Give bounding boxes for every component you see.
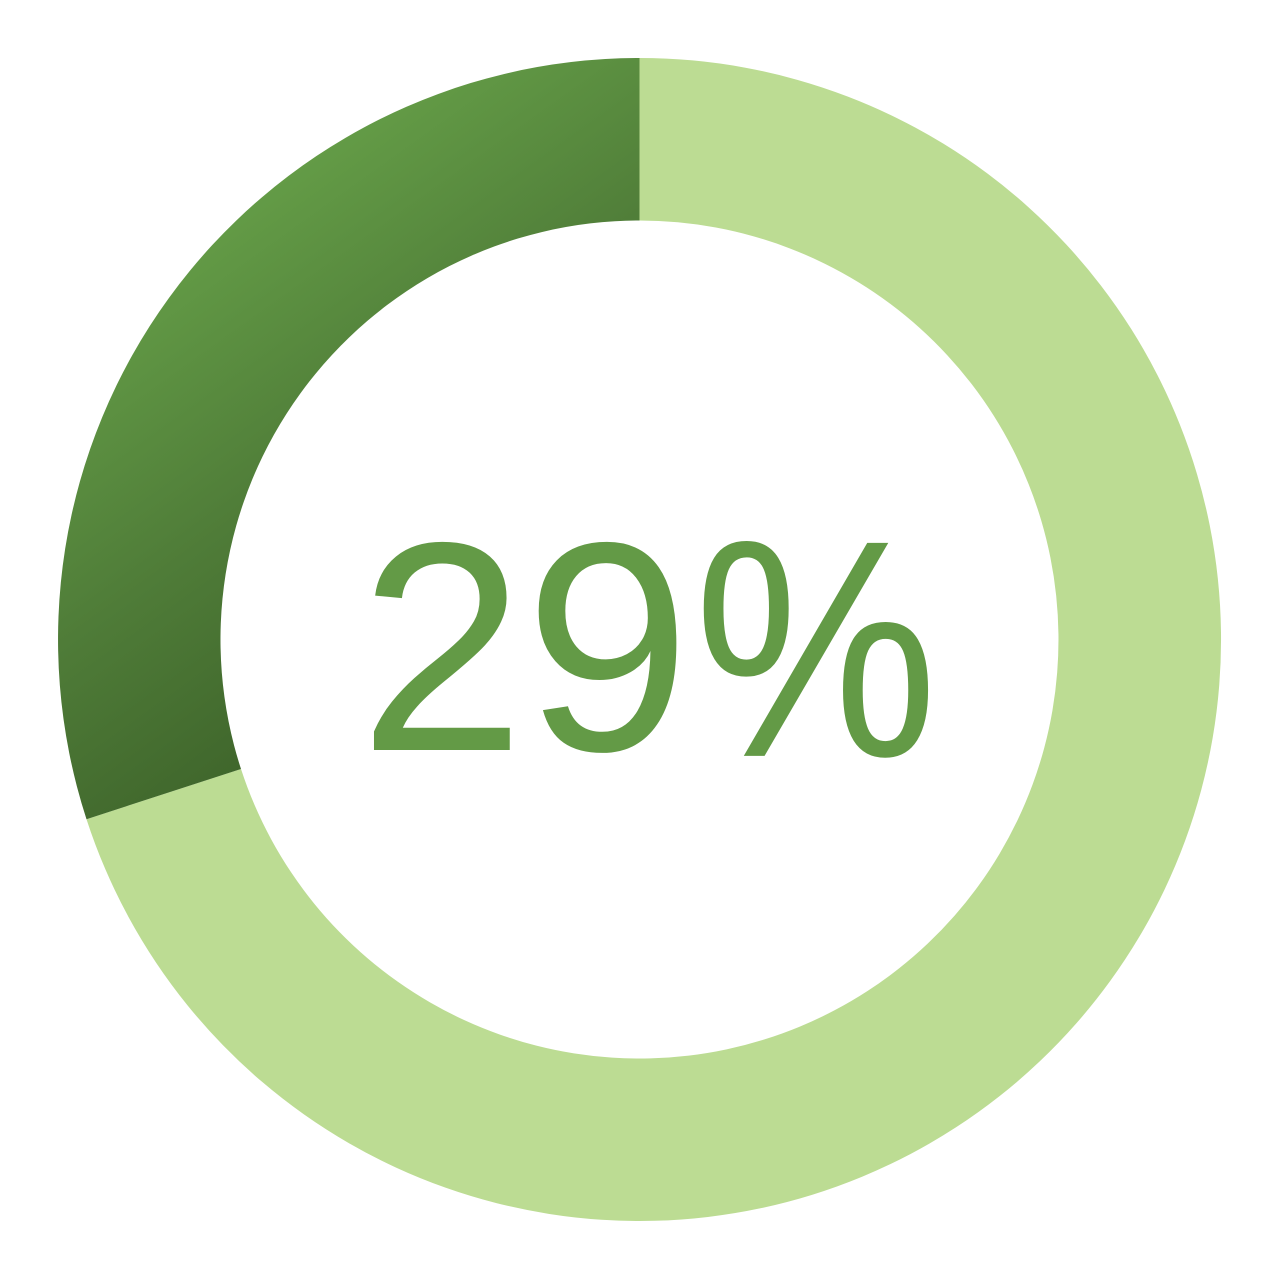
center percentage label: % bbox=[694, 475, 938, 822]
center percentage label bbox=[359, 475, 938, 822]
highlighted segment: 29% bbox=[58, 58, 640, 819]
center percentage label: 29 bbox=[359, 481, 690, 814]
